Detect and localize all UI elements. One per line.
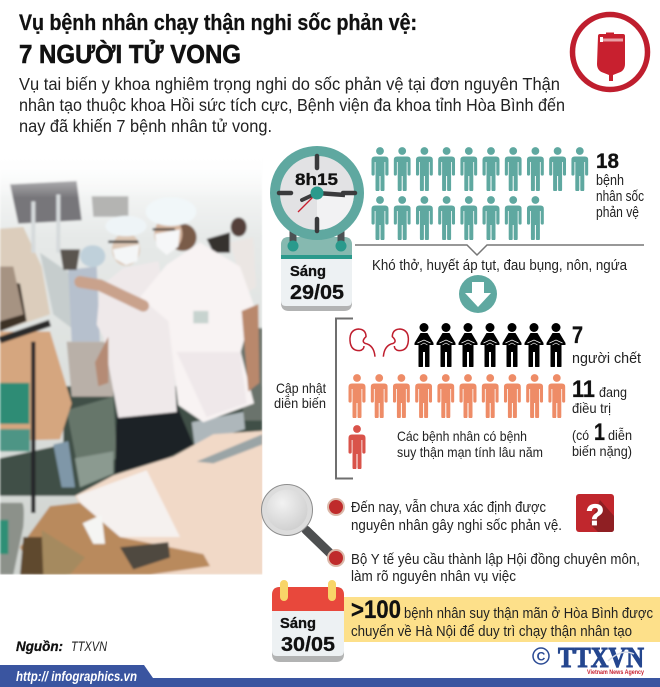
label: 7 deaths [572, 322, 642, 367]
label: 11 under treatment [572, 376, 632, 459]
source [16, 638, 108, 654]
title [19, 10, 417, 69]
calendar: Sáng 30/05: Sáng [280, 616, 316, 632]
logo: TTXVN [533, 643, 645, 676]
label: 11 under treatment: 1 [594, 419, 605, 446]
calendar: Sáng 30/05: 30/05 [281, 634, 335, 656]
label: 18 patients: phản vệ [596, 205, 639, 221]
logo: TTXVN: Vietnam News Agency [587, 670, 645, 676]
label: 11 under treatment: đang [599, 384, 627, 400]
intro text: Vụ tai biến y khoa nghiêm trọng nghi do sốc phản vệ tại đơn nguyên Thận [19, 74, 560, 94]
icon: blood bag [572, 14, 648, 90]
label: 18 patients: 18 [596, 150, 619, 173]
title: 7 NGƯỜI TỬ VONG [19, 38, 241, 69]
logo: TTXVN: TTXVN [558, 643, 644, 674]
text: chronic kidney failure note: Các bệnh nhân có bệnh [397, 428, 527, 444]
intro text: nay đã khiến 7 bệnh nhân tử vong. [19, 116, 272, 136]
label: 11 under treatment: (có [572, 427, 589, 443]
label: 11 under treatment: 11 [572, 376, 595, 403]
clock face [275, 151, 359, 235]
label: 18 patients [596, 150, 644, 221]
icon: magnifying glass [262, 484, 335, 558]
footer bar with URL: http:// infographics.vn [16, 668, 137, 684]
callout line: symptoms [355, 245, 644, 255]
source: Nguồn: [16, 638, 63, 654]
logo: TTXVN: C [537, 650, 546, 664]
bullet: Ministry of Health request [328, 550, 640, 585]
label: updates: diễn biến [274, 395, 326, 411]
pictogram: severe case [348, 425, 366, 470]
yellow band: transfer of over 100 patients: >100 [351, 596, 401, 624]
pictogram: 18 shocked patients [372, 147, 588, 240]
clock with date calendar [275, 151, 359, 311]
calendar: Sáng 30/05 [272, 584, 344, 662]
label: 18 patients: nhân sốc [596, 189, 644, 205]
bullet: cause unknown [328, 499, 562, 534]
label: 18 patients: bệnh [596, 173, 624, 189]
label: 7 deaths: người chết [572, 350, 642, 367]
intro text: nhân tạo thuộc khoa Hồi sức tích cực, Bệnh viện đa khoa tỉnh Hòa Bình đến [19, 95, 565, 115]
label: 7 deaths: 7 [572, 322, 583, 349]
bullet: cause unknown: nguyên nhân gây nghi sốc phản vệ. [351, 517, 562, 534]
bullet: Ministry of Health request: làm rõ nguyên nhân vụ việc [351, 568, 516, 585]
label: 11 under treatment: điều trị [572, 400, 611, 416]
pictogram: 7 deaths [414, 323, 566, 368]
icon: down arrow [459, 275, 497, 313]
icon: question mark [576, 494, 614, 532]
icon: kidneys [350, 329, 408, 357]
bracket [336, 318, 353, 478]
calendar: Sáng 29/05: 29/05 [290, 282, 344, 304]
clock face: 8h15 [295, 170, 338, 189]
yellow band: transfer of over 100 patients [344, 596, 660, 642]
calendar: Sáng 29/05: Sáng [290, 264, 326, 280]
label: updates [274, 380, 326, 411]
footer bar with URL [0, 665, 660, 687]
symptoms text: Khó thở, huyết áp tụt, đau bụng, nôn, ngứa [372, 258, 628, 274]
pictogram: 11 under treatment [348, 374, 565, 418]
text: chronic kidney failure note: suy thận mạn tính lâu năm [397, 444, 543, 460]
calendar: Sáng 29/05 [281, 228, 352, 311]
bullet: cause unknown: Đến nay, vẫn chưa xác định được [351, 499, 546, 516]
label: updates: Cập nhật [276, 380, 326, 396]
label: 11 under treatment: biến nặng) [572, 443, 632, 459]
icon: question mark: ? [586, 499, 604, 532]
title: Vụ bệnh nhân chạy thận nghi sốc phản vệ: [19, 10, 417, 35]
yellow band: transfer of over 100 patients: chuyển về Hà Nội để duy trì chạy thận nhân tạo [351, 623, 632, 640]
source: TTXVN [71, 638, 108, 654]
label: 11 under treatment: diễn [608, 427, 632, 443]
intro text [19, 74, 565, 136]
text: chronic kidney failure note [397, 428, 543, 460]
photo: doctors at the patient's bedside [0, 153, 263, 575]
